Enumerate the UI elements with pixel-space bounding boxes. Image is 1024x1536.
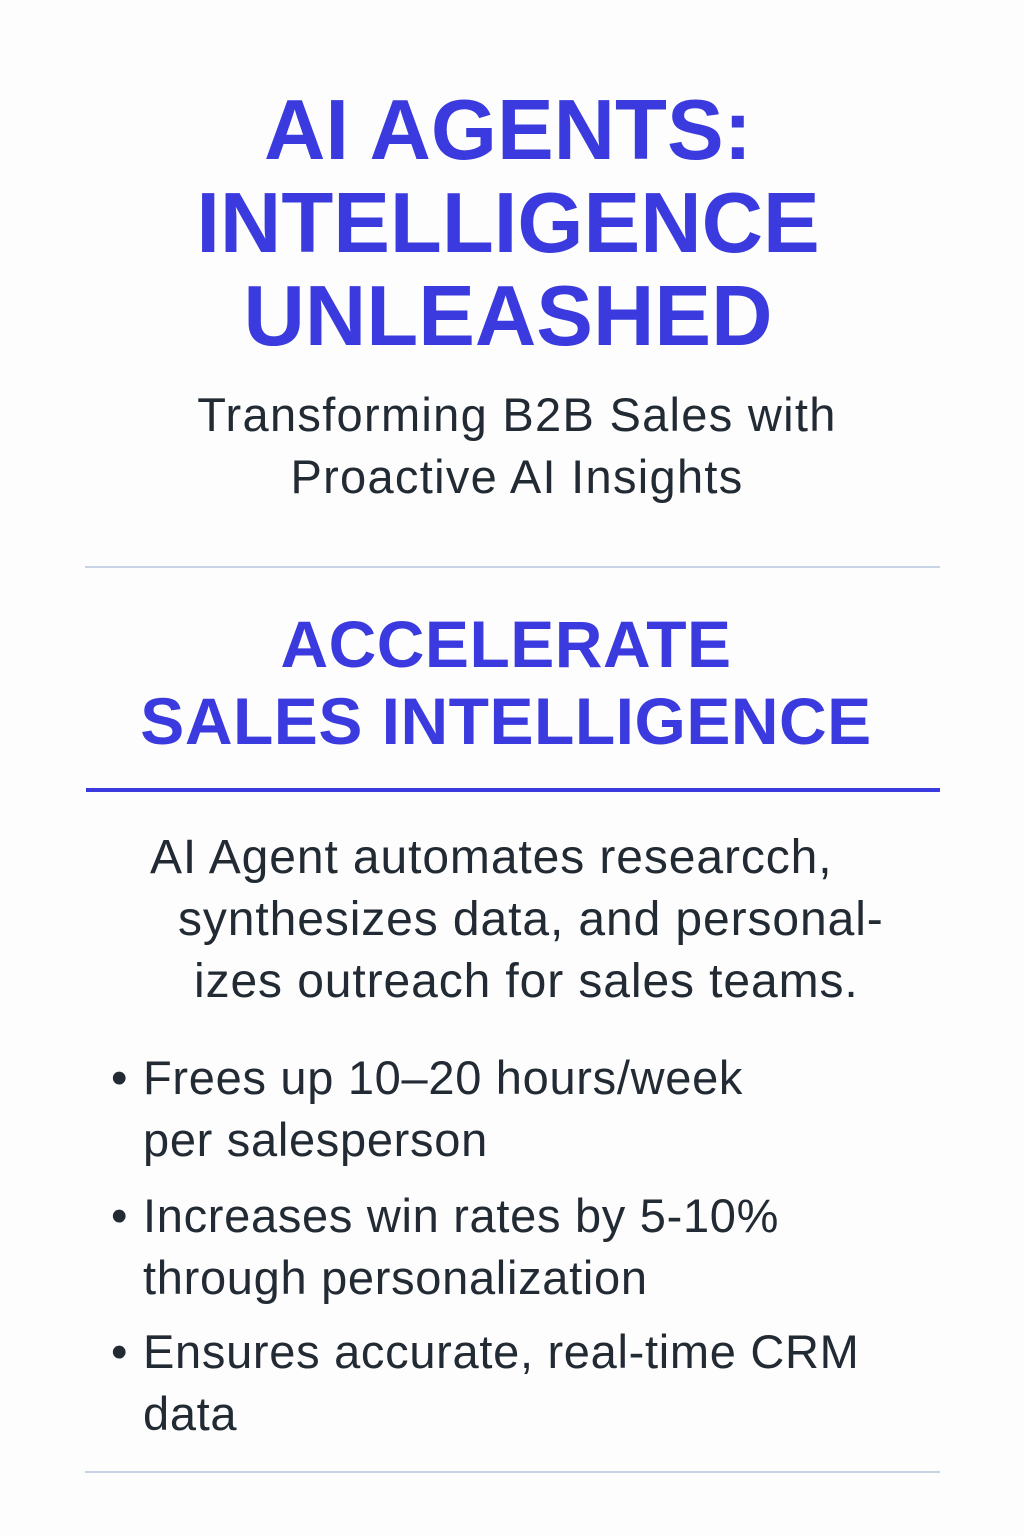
description text: synthesizes data, and personal- (178, 893, 884, 946)
section heading: SALES INTELLIGENCE (140, 684, 872, 758)
bullet: hours: per salesperson (143, 1113, 488, 1166)
title (196, 83, 820, 364)
section heading: ACCELERATE (280, 607, 732, 681)
bullet: CRM: Ensures accurate, real-time CRM (143, 1325, 859, 1378)
subtitle (197, 388, 837, 503)
subtitle: Transforming B2B Sales with (197, 388, 837, 441)
title: AI AGENTS: (264, 83, 752, 178)
bullet: CRM: data (143, 1387, 237, 1440)
bullet: CRM (111, 1325, 859, 1440)
bullet list: • (111, 1189, 128, 1242)
bullet list: • (111, 1325, 128, 1378)
bullet: win rates: Increases win rates by 5-10% (143, 1189, 779, 1242)
bullet list: • (111, 1051, 128, 1104)
bullet: hours (111, 1051, 743, 1166)
section heading (140, 607, 872, 758)
title: INTELLIGENCE (196, 176, 820, 271)
description text: AI Agent automates researcch, (150, 831, 832, 884)
bullet: win rates: through personalization (143, 1251, 648, 1304)
bullet list (111, 1051, 859, 1440)
bullet: win rates (111, 1189, 779, 1304)
title: UNLEASHED (244, 269, 772, 364)
bullet: hours: Frees up 10–20 hours/week (143, 1051, 743, 1104)
description text: izes outreach for sales teams. (194, 955, 859, 1008)
subtitle: Proactive AI Insights (290, 450, 744, 503)
description text (150, 831, 884, 1008)
